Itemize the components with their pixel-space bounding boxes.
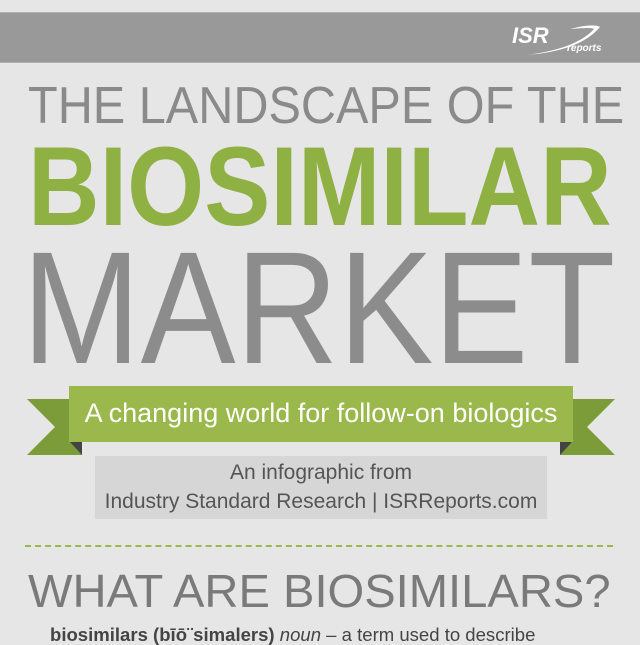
title line 3: MARKET bbox=[22, 218, 615, 397]
ribbon text: A changing world for follow-on biologics bbox=[85, 398, 557, 428]
logo: ISR reports: ISR bbox=[512, 23, 549, 48]
title line 1: THE LANDSCAPE OF THE bbox=[28, 77, 624, 135]
definition text: biosimilars (bīō¨simalers) noun – a term used to describe bbox=[50, 625, 535, 645]
credit box bbox=[95, 456, 547, 519]
logo: ISR reports: reports bbox=[567, 43, 602, 54]
credit box: Industry Standard Research | ISRReports.com bbox=[105, 490, 537, 513]
section heading: WHAT ARE BIOSIMILARS? bbox=[28, 565, 611, 617]
logo: ISR reports bbox=[512, 23, 602, 55]
title line 2: BIOSIMILAR bbox=[28, 124, 612, 249]
credit box: An infographic from bbox=[230, 461, 412, 484]
ribbon banner bbox=[27, 386, 615, 455]
header bar bbox=[0, 12, 640, 63]
